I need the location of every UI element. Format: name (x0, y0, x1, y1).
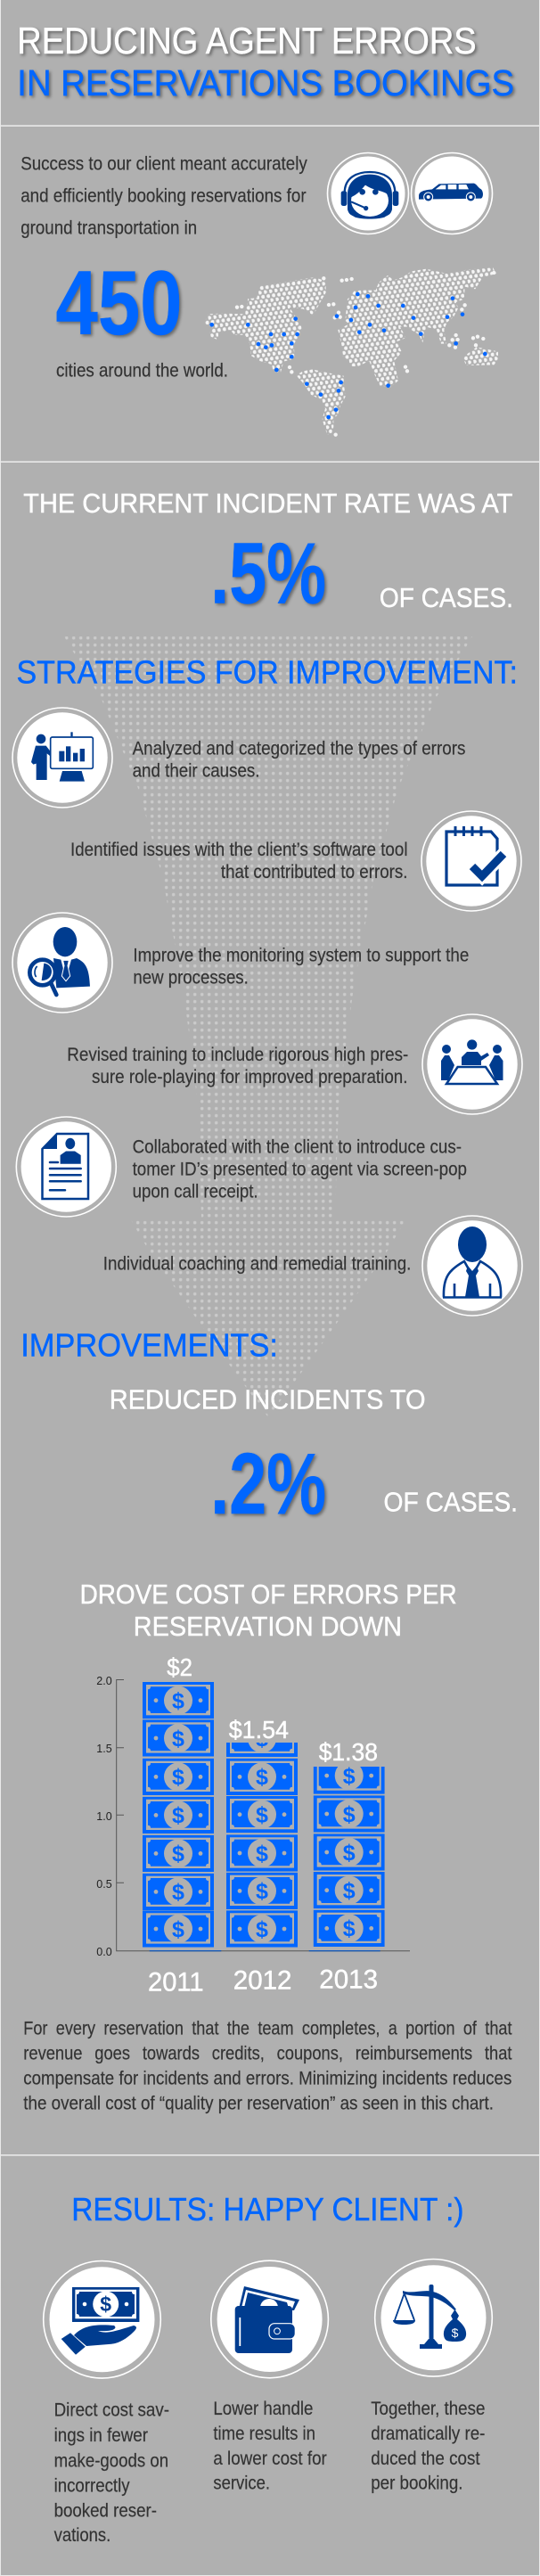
strategy 3 text: new processes. (133, 967, 249, 988)
result 3 text: duced the cost (371, 2449, 480, 2469)
strategy 1 text (133, 739, 465, 782)
big number .2%: .2% (210, 1435, 326, 1532)
of cases caption: OF CASES. (380, 582, 513, 613)
chart axis (96, 1675, 410, 1958)
value labels: $1.54 (229, 1716, 289, 1743)
intro text: ground transportation in (20, 218, 197, 239)
dotted world map (204, 267, 498, 437)
result 2 text: a lower cost for (213, 2449, 327, 2469)
strategy 5 text: tomer ID’s presented to agent via screen-pop (133, 1159, 467, 1179)
heading: results: RESULTS: HAPPY CLIENT :) (71, 2191, 464, 2227)
strategy 6 text: Individual coaching and remedial training. (103, 1253, 411, 1274)
year labels: 2011 (148, 1967, 204, 1997)
intro text (20, 154, 307, 239)
result 1 text: booked reser- (54, 2500, 157, 2521)
strategy 1 text: Analyzed and categorized the types of errors (133, 739, 465, 759)
heading: cost of errors: DROVE COST OF ERRORS PER (80, 1579, 457, 1610)
heading: cost of errors: RESERVATION DOWN (134, 1612, 402, 1642)
icon: scales with money bag: $ (452, 2326, 459, 2340)
chart axis: 0.0 (96, 1946, 112, 1958)
icon: man with magnifier (12, 913, 112, 1013)
strategy 2 text: that contributed to errors. (221, 862, 408, 882)
chart axis: 0.5 (96, 1878, 112, 1891)
icon: limousine (412, 153, 492, 234)
result 1 text (54, 2400, 169, 2546)
icon: notepad with check (421, 811, 521, 911)
big number 450: 450 (55, 252, 182, 354)
result 2 text: service. (213, 2473, 270, 2494)
chart axis: 1.0 (96, 1810, 112, 1823)
bar 2013 (314, 1757, 385, 1947)
year labels: 2012 (233, 1966, 291, 1996)
result 1 text: ings in fewer (54, 2425, 148, 2446)
explanation paragraph: the overall cost of “quality per reservation” as seen in this chart. (23, 2094, 494, 2114)
cities caption: cities around the world. (56, 361, 228, 381)
icon: money in hand (44, 2260, 160, 2378)
icon: scales with money bag (375, 2259, 492, 2376)
intro text: Success to our client meant accurately (20, 154, 307, 175)
title (17, 20, 514, 103)
result 3 text: per booking. (371, 2473, 463, 2494)
of cases caption: OF CASES. (383, 1487, 518, 1518)
dotted arrow background (53, 633, 490, 1422)
city markers (209, 292, 487, 419)
icon: businessman (422, 1216, 522, 1316)
section dividers (1, 125, 539, 2156)
strategy 4 text (67, 1045, 408, 1087)
strategy 4 text: Revised training to include rigorous high pres- (67, 1045, 408, 1065)
result 2 text: Lower handle (213, 2399, 313, 2419)
strategy 5 text (133, 1136, 467, 1202)
value labels: $2 (167, 1653, 192, 1681)
strategy 2 text: Identified issues with the client’s software tool (70, 840, 408, 860)
value labels (167, 1653, 378, 1766)
heading: cost of errors (80, 1579, 457, 1642)
heading: improvements: IMPROVEMENTS: (20, 1327, 278, 1364)
result 3 text: Together, these (371, 2399, 485, 2419)
result 2 text: time results in (213, 2424, 315, 2444)
map outlying dots (235, 271, 495, 437)
year labels: 2013 (319, 1965, 378, 1995)
heading: reduced incidents: REDUCED INCIDENTS TO (110, 1384, 426, 1415)
result 1 text: incorrectly (54, 2475, 130, 2496)
icon: agent headset (328, 153, 408, 234)
strategy 4 text: sure role-playing for improved preparation. (92, 1067, 408, 1087)
strategy 3 text (133, 945, 469, 988)
strategy 5 text: Collaborated with the client to introduce cus- (133, 1136, 462, 1157)
strategy 2 text (70, 840, 408, 882)
result 3 text (371, 2399, 485, 2494)
title: IN RESERVATIONS BOOKINGS (17, 62, 514, 103)
chart axis: 1.5 (96, 1743, 112, 1755)
icon: wallet (211, 2260, 328, 2378)
result 1 text: make-goods on (54, 2450, 168, 2471)
bar chart: cost per reservation (96, 1653, 410, 1997)
heading: current incident rate: THE CURRENT INCIDENT RATE WAS AT (23, 488, 512, 519)
map continents (204, 267, 498, 435)
icon: customer ID document (16, 1117, 116, 1217)
big number .5%: .5% (210, 525, 326, 622)
result 1 text: vations. (54, 2525, 110, 2546)
value labels: $1.38 (319, 1738, 378, 1766)
strategy 3 text: Improve the monitoring system to support the (133, 945, 469, 965)
result 1 text: Direct cost sav- (54, 2400, 169, 2421)
bar 2012 (226, 1720, 298, 1948)
heading: strategies: STRATEGIES FOR IMPROVEMENT: (16, 654, 518, 691)
intro text: and efficiently booking reservations for (20, 186, 307, 207)
chart axis: 2.0 (96, 1675, 112, 1687)
year labels (148, 1965, 378, 1997)
icon: presenter with chart (12, 708, 112, 808)
bar 2011 (143, 1682, 214, 1948)
explanation paragraph (23, 2019, 512, 2114)
strategy 5 text: upon call receipt. (133, 1181, 258, 1202)
icon: team at table (422, 1014, 522, 1114)
result 2 text (213, 2399, 327, 2494)
strategy 1 text: and their causes. (133, 761, 260, 782)
icon: money in hand: $ (100, 2293, 111, 2316)
result 3 text: dramatically re- (371, 2424, 485, 2444)
title: REDUCING AGENT ERRORS (17, 20, 477, 62)
